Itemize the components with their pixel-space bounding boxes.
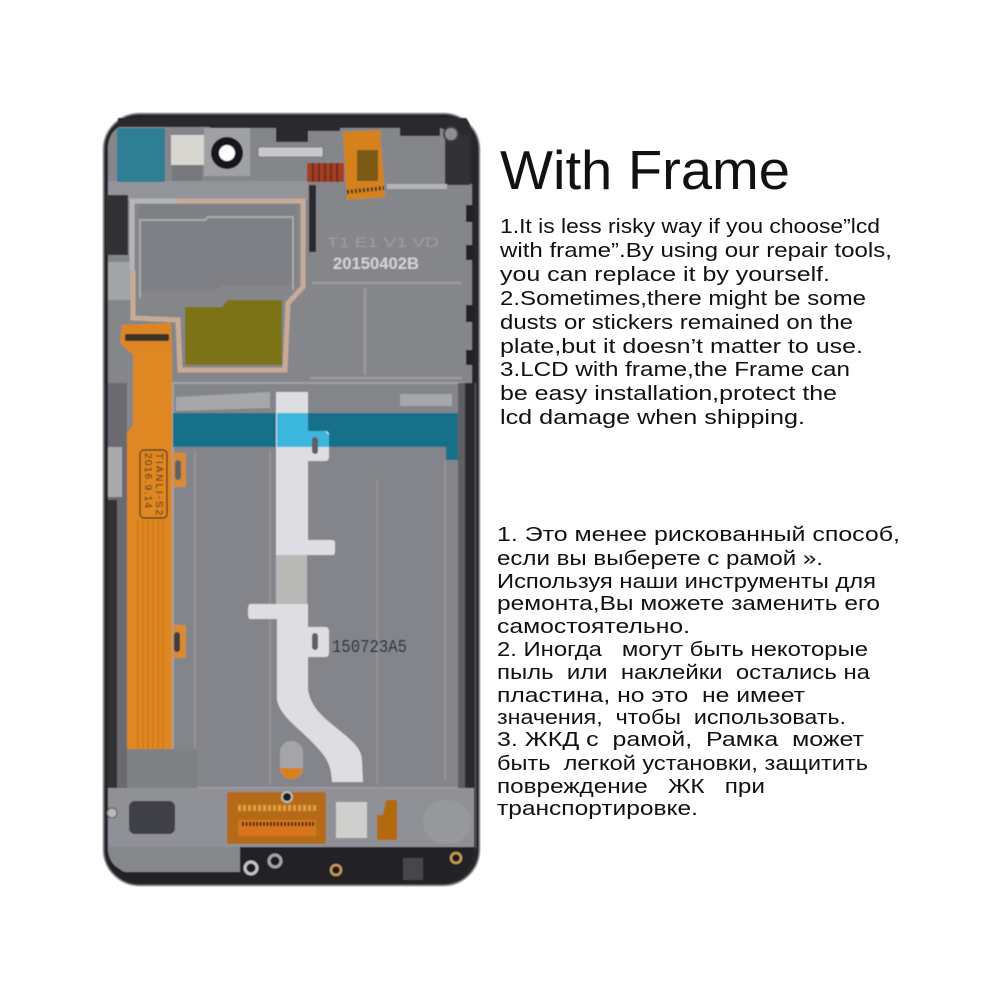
inner metal plate xyxy=(108,123,472,873)
highlight streak xyxy=(176,392,452,411)
english text block: 3.LCD with frame,the Frame can xyxy=(500,358,850,381)
olive flex window xyxy=(357,150,378,181)
PCB contacts upper xyxy=(238,805,318,811)
gray strip middle xyxy=(276,555,307,604)
left side bracket xyxy=(108,262,132,300)
screw bottom 1 xyxy=(245,862,257,874)
top ribbon connector xyxy=(120,323,172,355)
white strip upper xyxy=(276,392,335,555)
screw bottom 2 xyxy=(269,855,281,867)
top metal strip xyxy=(108,181,308,200)
metal rib xyxy=(387,184,447,189)
screw top right xyxy=(444,127,458,141)
teal band xyxy=(173,413,458,460)
russian text block: повреждение ЖК при xyxy=(497,775,765,798)
right side frame xyxy=(458,383,476,848)
bottom band block xyxy=(403,858,423,880)
orange top flex xyxy=(343,130,385,200)
russian text block: ремонта,Вы можете заменить его xyxy=(497,592,880,615)
horizontal ribs xyxy=(310,283,462,378)
PCB screw xyxy=(282,792,292,802)
faint stamp text: T1 E1 V1 VD xyxy=(327,234,439,250)
olive sticker xyxy=(185,300,282,365)
english text block: plate,but it doesn’t matter to use. xyxy=(500,335,863,358)
oval cutout xyxy=(280,741,303,779)
russian text block: самостоятельно. xyxy=(497,615,690,638)
orange flex ribbon xyxy=(127,350,172,749)
phone LCD frame photo xyxy=(104,114,480,886)
bright blue overlap xyxy=(277,413,329,447)
bottom black band xyxy=(106,847,474,882)
bottom left metal xyxy=(108,847,240,872)
english text block: dusts or stickers remained on the xyxy=(500,311,853,334)
flex contacts xyxy=(347,188,384,192)
speaker dark rect xyxy=(129,801,175,834)
bracket under square xyxy=(172,165,202,181)
russian text block: 1. Это менее рискованный способ, xyxy=(497,523,900,546)
small orange pad xyxy=(377,800,397,840)
top right dark corner xyxy=(445,135,470,185)
russian text block: 2. Иногда могут быть некоторые xyxy=(497,638,868,661)
PCB dark pins xyxy=(242,822,314,826)
russian text block: транспортировке. xyxy=(497,797,698,820)
english text block: be easy installation,protect the xyxy=(500,382,837,405)
ribbon traces xyxy=(138,520,163,749)
screw left xyxy=(107,808,117,818)
slot hole lower xyxy=(312,633,318,650)
shield panel xyxy=(139,205,296,292)
orange clip upper xyxy=(173,453,186,487)
camera lens xyxy=(219,145,235,161)
top notch blocks xyxy=(276,125,440,142)
russian text block: пластина, но это не имеет xyxy=(497,684,806,707)
PCB contacts lower xyxy=(238,820,316,836)
flex stamp: 2016.9.14 xyxy=(142,453,153,508)
orange PCB xyxy=(227,792,326,844)
english text block: you can replace it by yourself. xyxy=(500,263,830,286)
russian text block: 3. ЖКД с рамой, Рамка может xyxy=(497,728,865,751)
dark vertical bar xyxy=(309,185,316,252)
silver square xyxy=(171,135,204,165)
flex stamp: TIANLI-S2 xyxy=(153,453,164,515)
russian text block: Используя наши инструменты для xyxy=(497,570,876,593)
screen reflection lines xyxy=(195,450,445,785)
silver pad xyxy=(336,802,367,838)
left side frame xyxy=(108,383,127,788)
right side notches xyxy=(466,205,474,365)
english text block: 1.It is less risky way if you choose”lcd xyxy=(500,215,880,238)
title: With Frame xyxy=(500,139,790,201)
shield inner outline xyxy=(140,217,293,298)
gold contact 1 xyxy=(331,865,341,875)
ribbon base shadow xyxy=(127,749,197,788)
right dark strip xyxy=(465,383,475,848)
top connector xyxy=(258,147,323,157)
left side slots xyxy=(108,447,122,497)
tan gasket xyxy=(133,201,303,370)
stamp 20150402B: 20150402B xyxy=(333,254,419,273)
white strip lower xyxy=(248,604,363,782)
clip hole lower xyxy=(174,632,180,652)
russian text block xyxy=(497,523,900,820)
camera hole xyxy=(211,137,243,169)
gold contact 2 xyxy=(451,853,461,863)
clip hole upper xyxy=(175,460,181,480)
connector slot xyxy=(125,334,169,341)
scratched corner xyxy=(423,800,471,844)
camera bracket xyxy=(204,128,250,176)
english text block xyxy=(499,215,892,429)
gasket gray part xyxy=(132,201,177,270)
slot hole upper xyxy=(312,437,318,454)
teal tape top left xyxy=(117,128,165,182)
left inner black strip xyxy=(108,500,117,790)
orange clip lower xyxy=(173,625,186,658)
print 150723A5: 150723A5 xyxy=(332,638,407,658)
russian text block: если вы выберете с рамой ». xyxy=(497,547,823,570)
red flex stripes xyxy=(307,163,344,182)
top dark band xyxy=(118,118,472,184)
english text block: with frame”.By using our repair tools, xyxy=(499,239,892,262)
english text block: lcd damage when shipping. xyxy=(500,406,805,429)
oval orange tip xyxy=(280,768,303,779)
glass panel lower xyxy=(173,383,463,788)
english text block: 2.Sometimes,there might be some xyxy=(500,287,866,310)
bottom metal area xyxy=(108,788,474,848)
outer frame xyxy=(104,114,480,886)
russian text block: значения, чтобы использовать. xyxy=(497,706,846,729)
flex stamp xyxy=(140,450,167,518)
russian text block: пыль или наклейки остались на xyxy=(497,661,871,684)
russian text block: быть легкой установки, защитить xyxy=(497,752,868,775)
left dark side xyxy=(106,195,128,255)
